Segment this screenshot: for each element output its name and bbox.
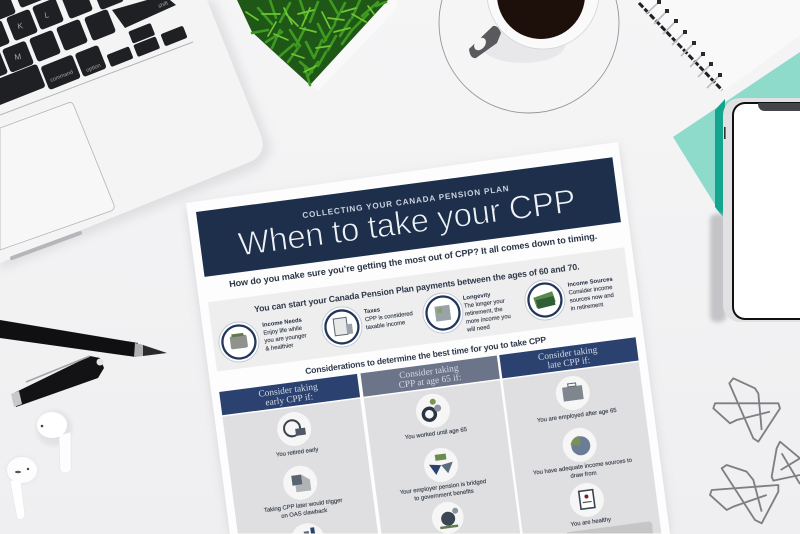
coffee cup and saucer xyxy=(439,0,619,113)
intro line: How do you make sure you’re getting the most out of CPP? It all comes down to timing. xyxy=(229,231,598,289)
item: pension bridged xyxy=(395,443,488,504)
key legends: option xyxy=(86,63,102,74)
column header: early CPP if: xyxy=(265,391,314,409)
key legends: L xyxy=(44,10,50,20)
factor: income sources: Consider income xyxy=(568,285,613,297)
keyboard keys xyxy=(0,0,188,116)
factor: income needs xyxy=(216,313,309,364)
laptop xyxy=(0,0,272,270)
column header: Consider taking xyxy=(399,364,459,381)
factor: longevity xyxy=(421,284,512,339)
paper clips xyxy=(710,378,800,523)
factor: income needs: Income Needs xyxy=(262,318,303,329)
item: employed xyxy=(532,371,618,424)
item: healthy xyxy=(566,480,611,528)
factor: income sources xyxy=(523,271,618,322)
header banner xyxy=(196,157,621,277)
teal notebook xyxy=(673,52,800,322)
cup handle xyxy=(469,26,501,58)
key legends xyxy=(14,0,170,84)
factor: taxes: taxable income xyxy=(366,320,406,331)
factor: longevity: more income you xyxy=(466,314,511,326)
column header: CPP at age 65 if: xyxy=(398,372,462,391)
title: When to take your CPP xyxy=(236,182,578,263)
item: OAS clawback: on OAS clawback xyxy=(281,508,328,520)
column header xyxy=(360,355,500,397)
item: chart icon xyxy=(292,523,323,534)
pen xyxy=(0,320,167,357)
item: money icon xyxy=(432,502,464,534)
pen cap xyxy=(11,356,104,407)
factor: longevity: The longer your xyxy=(464,298,505,310)
factor: income sources: in retirement xyxy=(571,302,604,312)
item: pension bridged: to government benefits xyxy=(414,489,474,502)
factor: taxes xyxy=(320,298,416,349)
panel: factors xyxy=(208,247,633,372)
item: worked until 65: You worked until age 65 xyxy=(405,427,468,441)
item: income sources: You have adequate income sources to xyxy=(533,458,633,477)
key legends: K xyxy=(17,21,24,31)
factor: income needs: Enjoy life while xyxy=(263,326,302,337)
factor: taxes: Taxes xyxy=(364,307,381,315)
key legends: shift xyxy=(158,0,170,10)
earbuds xyxy=(7,410,72,520)
column header xyxy=(499,337,639,378)
column header: Consider taking xyxy=(258,382,319,400)
factor: income needs: you are younger xyxy=(264,333,307,345)
item: employed: You are employed after age 65 xyxy=(537,408,618,424)
spiral notebook xyxy=(639,0,800,91)
factor: longevity: Longevity xyxy=(463,292,492,302)
factor: taxes: CPP is considered xyxy=(365,311,413,323)
item: healthy: You are healthy xyxy=(570,517,611,528)
item: income sources xyxy=(528,421,634,485)
plant xyxy=(237,0,397,91)
factor: income needs: & healthier xyxy=(265,343,294,353)
key legends: command xyxy=(50,69,74,84)
column header: late CPP if: xyxy=(547,355,591,371)
item: retired early xyxy=(271,409,319,459)
section heading: Considerations to determine the best time for you to take CPP xyxy=(305,334,547,376)
column: late CPP xyxy=(499,337,661,534)
smartphone xyxy=(710,98,800,322)
item: OAS clawback xyxy=(259,461,344,522)
panel heading: You can start your Canada Pension Plan payments between the ages of 60 and 70. xyxy=(254,261,580,314)
factor: longevity: retirement, the xyxy=(465,307,503,318)
key legends: M xyxy=(14,52,22,62)
factor: longevity: will need xyxy=(466,325,490,334)
trackpad xyxy=(0,102,114,250)
item: income sources: draw from xyxy=(570,470,597,480)
column: early CPP xyxy=(219,374,378,534)
eyebrow: COLLECTING YOUR CANADA PENSION PLAN xyxy=(302,184,509,220)
grey callout xyxy=(567,522,653,534)
factor: income sources: sources now and xyxy=(569,293,614,304)
column header: Consider taking xyxy=(538,345,598,363)
infographic paper xyxy=(186,142,670,534)
item: retired early: You retired early xyxy=(276,447,319,459)
factor: income sources: Income Sources xyxy=(567,277,614,289)
laptop notch xyxy=(12,233,80,258)
item: pension bridged: Your employer pension is bridged xyxy=(400,479,487,496)
column header xyxy=(219,374,360,415)
item: OAS clawback: Taking CPP later would trigger xyxy=(264,498,343,514)
column: CPP at 65 xyxy=(360,355,520,534)
item: worked until 65 xyxy=(400,390,468,441)
